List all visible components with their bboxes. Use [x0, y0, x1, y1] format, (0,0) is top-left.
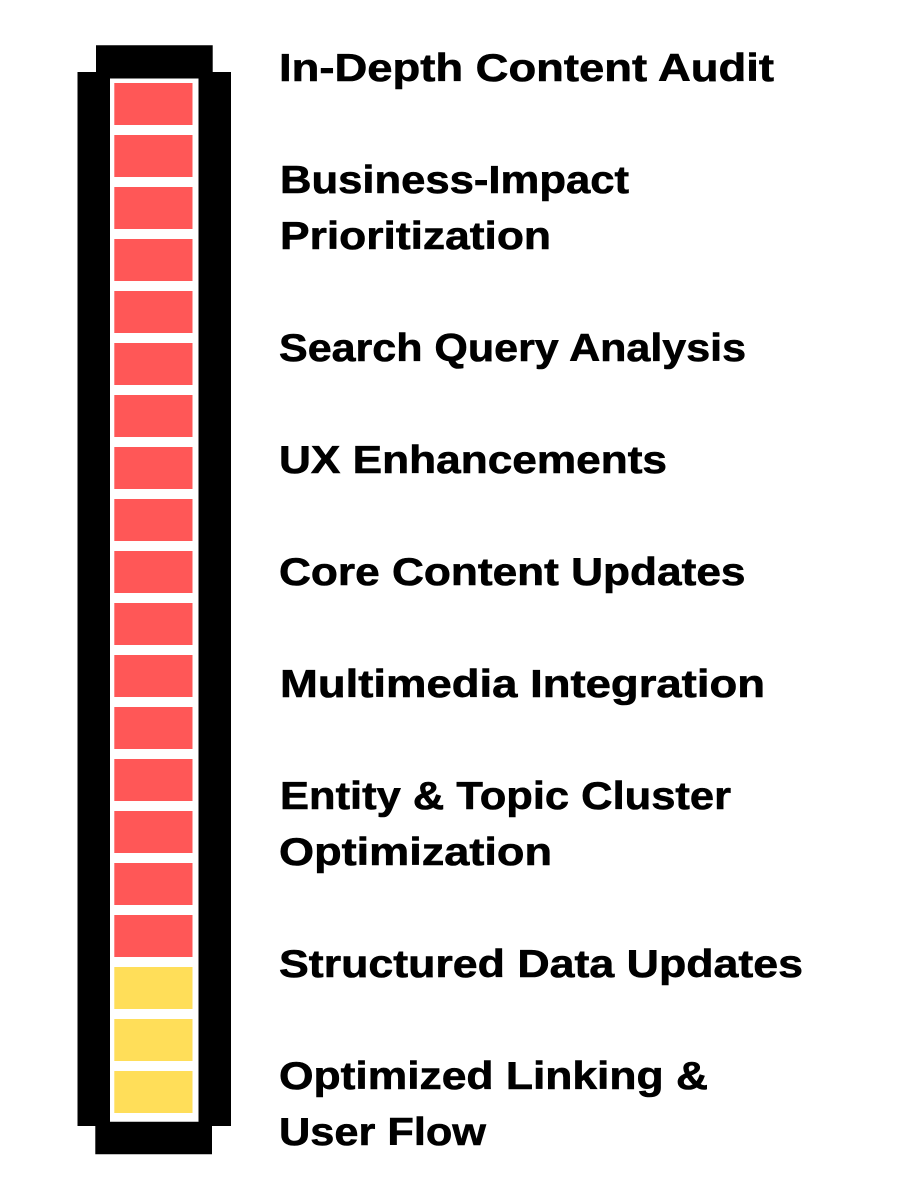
label: Optimized Linking & User Flow: Optimized Linking &: [279, 1055, 708, 1098]
label: Business-Impact Prioritization: Business-Impact: [280, 159, 629, 202]
label: In-Depth Content Audit: In-Depth Content Audit: [279, 47, 774, 90]
label: Business-Impact Prioritization: [280, 159, 629, 258]
label: Optimized Linking & User Flow: [279, 1055, 708, 1154]
label: Multimedia Integration: Multimedia Integration: [280, 663, 765, 706]
bar frame: [78, 45, 231, 1154]
pixel-style progress bar: [78, 45, 231, 1154]
step labels: [279, 47, 803, 1154]
label: Optimized Linking & User Flow: User Flow: [279, 1111, 487, 1154]
label: Structured Data Updates: Structured Data Updates: [279, 943, 803, 986]
label: Entity & Topic Cluster Optimization: [279, 775, 731, 874]
label: Entity & Topic Cluster Optimization: Entity & Topic Cluster: [280, 775, 731, 818]
label: Entity & Topic Cluster Optimization: Optimization: [279, 831, 552, 874]
label: Search Query Analysis: Search Query Analysis: [279, 327, 746, 370]
red segments: [114, 83, 192, 957]
yellow segments: [114, 967, 192, 1113]
label: Business-Impact Prioritization: Prioritization: [280, 215, 551, 258]
label: Core Content Updates: Core Content Updates: [279, 551, 746, 594]
label: UX Enhancements: UX Enhancements: [279, 439, 667, 482]
